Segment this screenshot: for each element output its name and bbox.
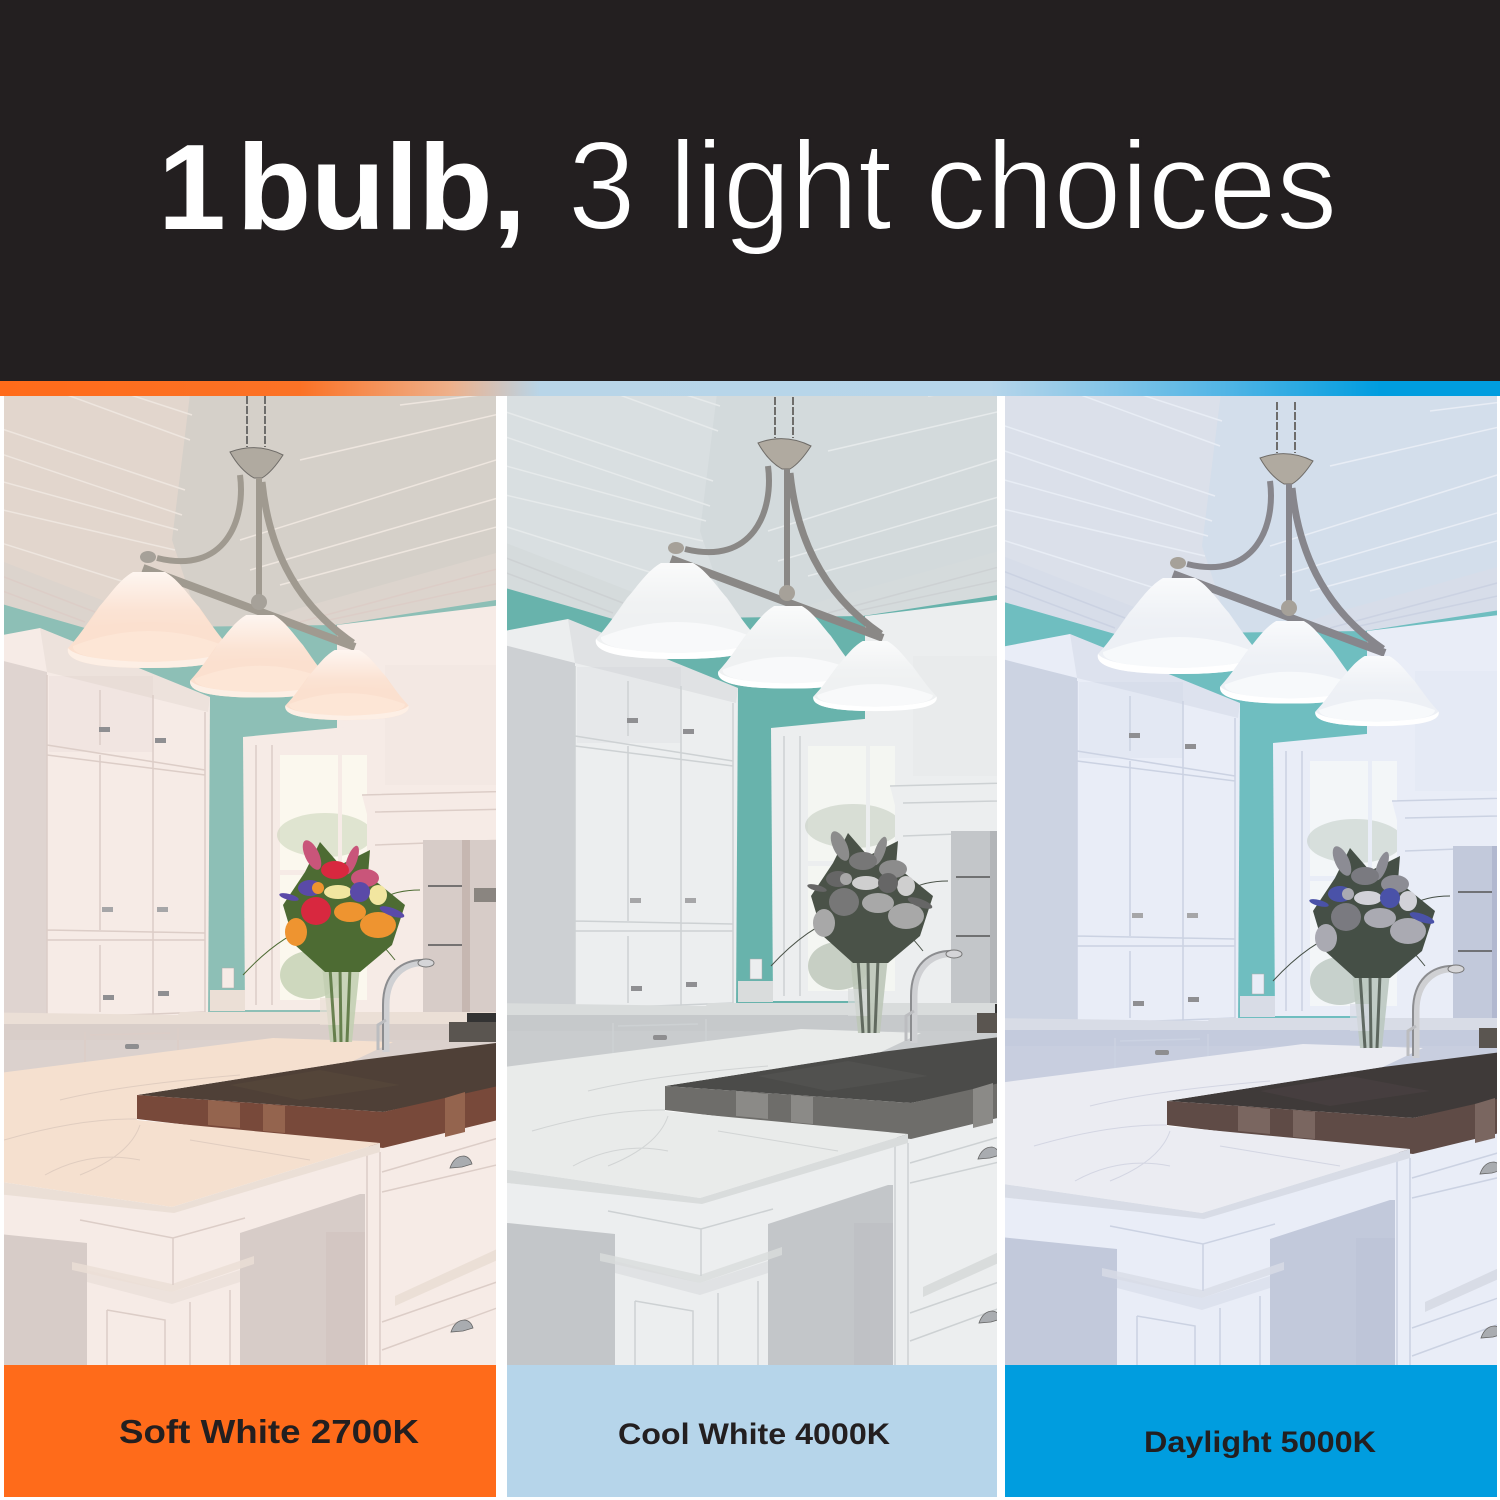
- label: daylight: [1005, 1365, 1497, 1497]
- scene: room with cabinets and window: [4, 396, 496, 1080]
- label: cool white: Cool White 4000K: [618, 1418, 890, 1451]
- faucet: [906, 950, 962, 1043]
- flowers in vase: [1273, 844, 1450, 1048]
- pendant lamp: [1098, 402, 1439, 726]
- panel: cool white kitchen: [507, 396, 997, 1365]
- header band: [0, 0, 1500, 381]
- faucet: [1408, 965, 1464, 1058]
- pendant lamp: [596, 387, 937, 711]
- label: soft white: Soft White 2700K: [119, 1413, 419, 1450]
- scene: room with cabinets and window: [990, 376, 1500, 1086]
- colour temperature gradient bar: [0, 381, 1500, 396]
- scene: room with cabinets and window: [507, 396, 997, 1071]
- title: 1 bulb,: [158, 119, 526, 255]
- title: [158, 117, 1337, 256]
- title: 3 light choices: [568, 117, 1337, 256]
- panel: soft white kitchen: [4, 396, 496, 1365]
- pendant lamp: [68, 396, 409, 720]
- label: daylight: Daylight 5000K: [1144, 1426, 1376, 1459]
- panel: daylight kitchen: [990, 376, 1500, 1408]
- scene: kitchen island: [1005, 1044, 1497, 1365]
- flowers in vase: [243, 838, 420, 1042]
- label: cool white: [507, 1365, 997, 1497]
- flowers in vase: [771, 829, 948, 1033]
- faucet: [378, 959, 434, 1052]
- scene: kitchen island: [507, 1029, 997, 1365]
- label: soft white: [4, 1365, 496, 1497]
- scene: kitchen island: [4, 1038, 496, 1365]
